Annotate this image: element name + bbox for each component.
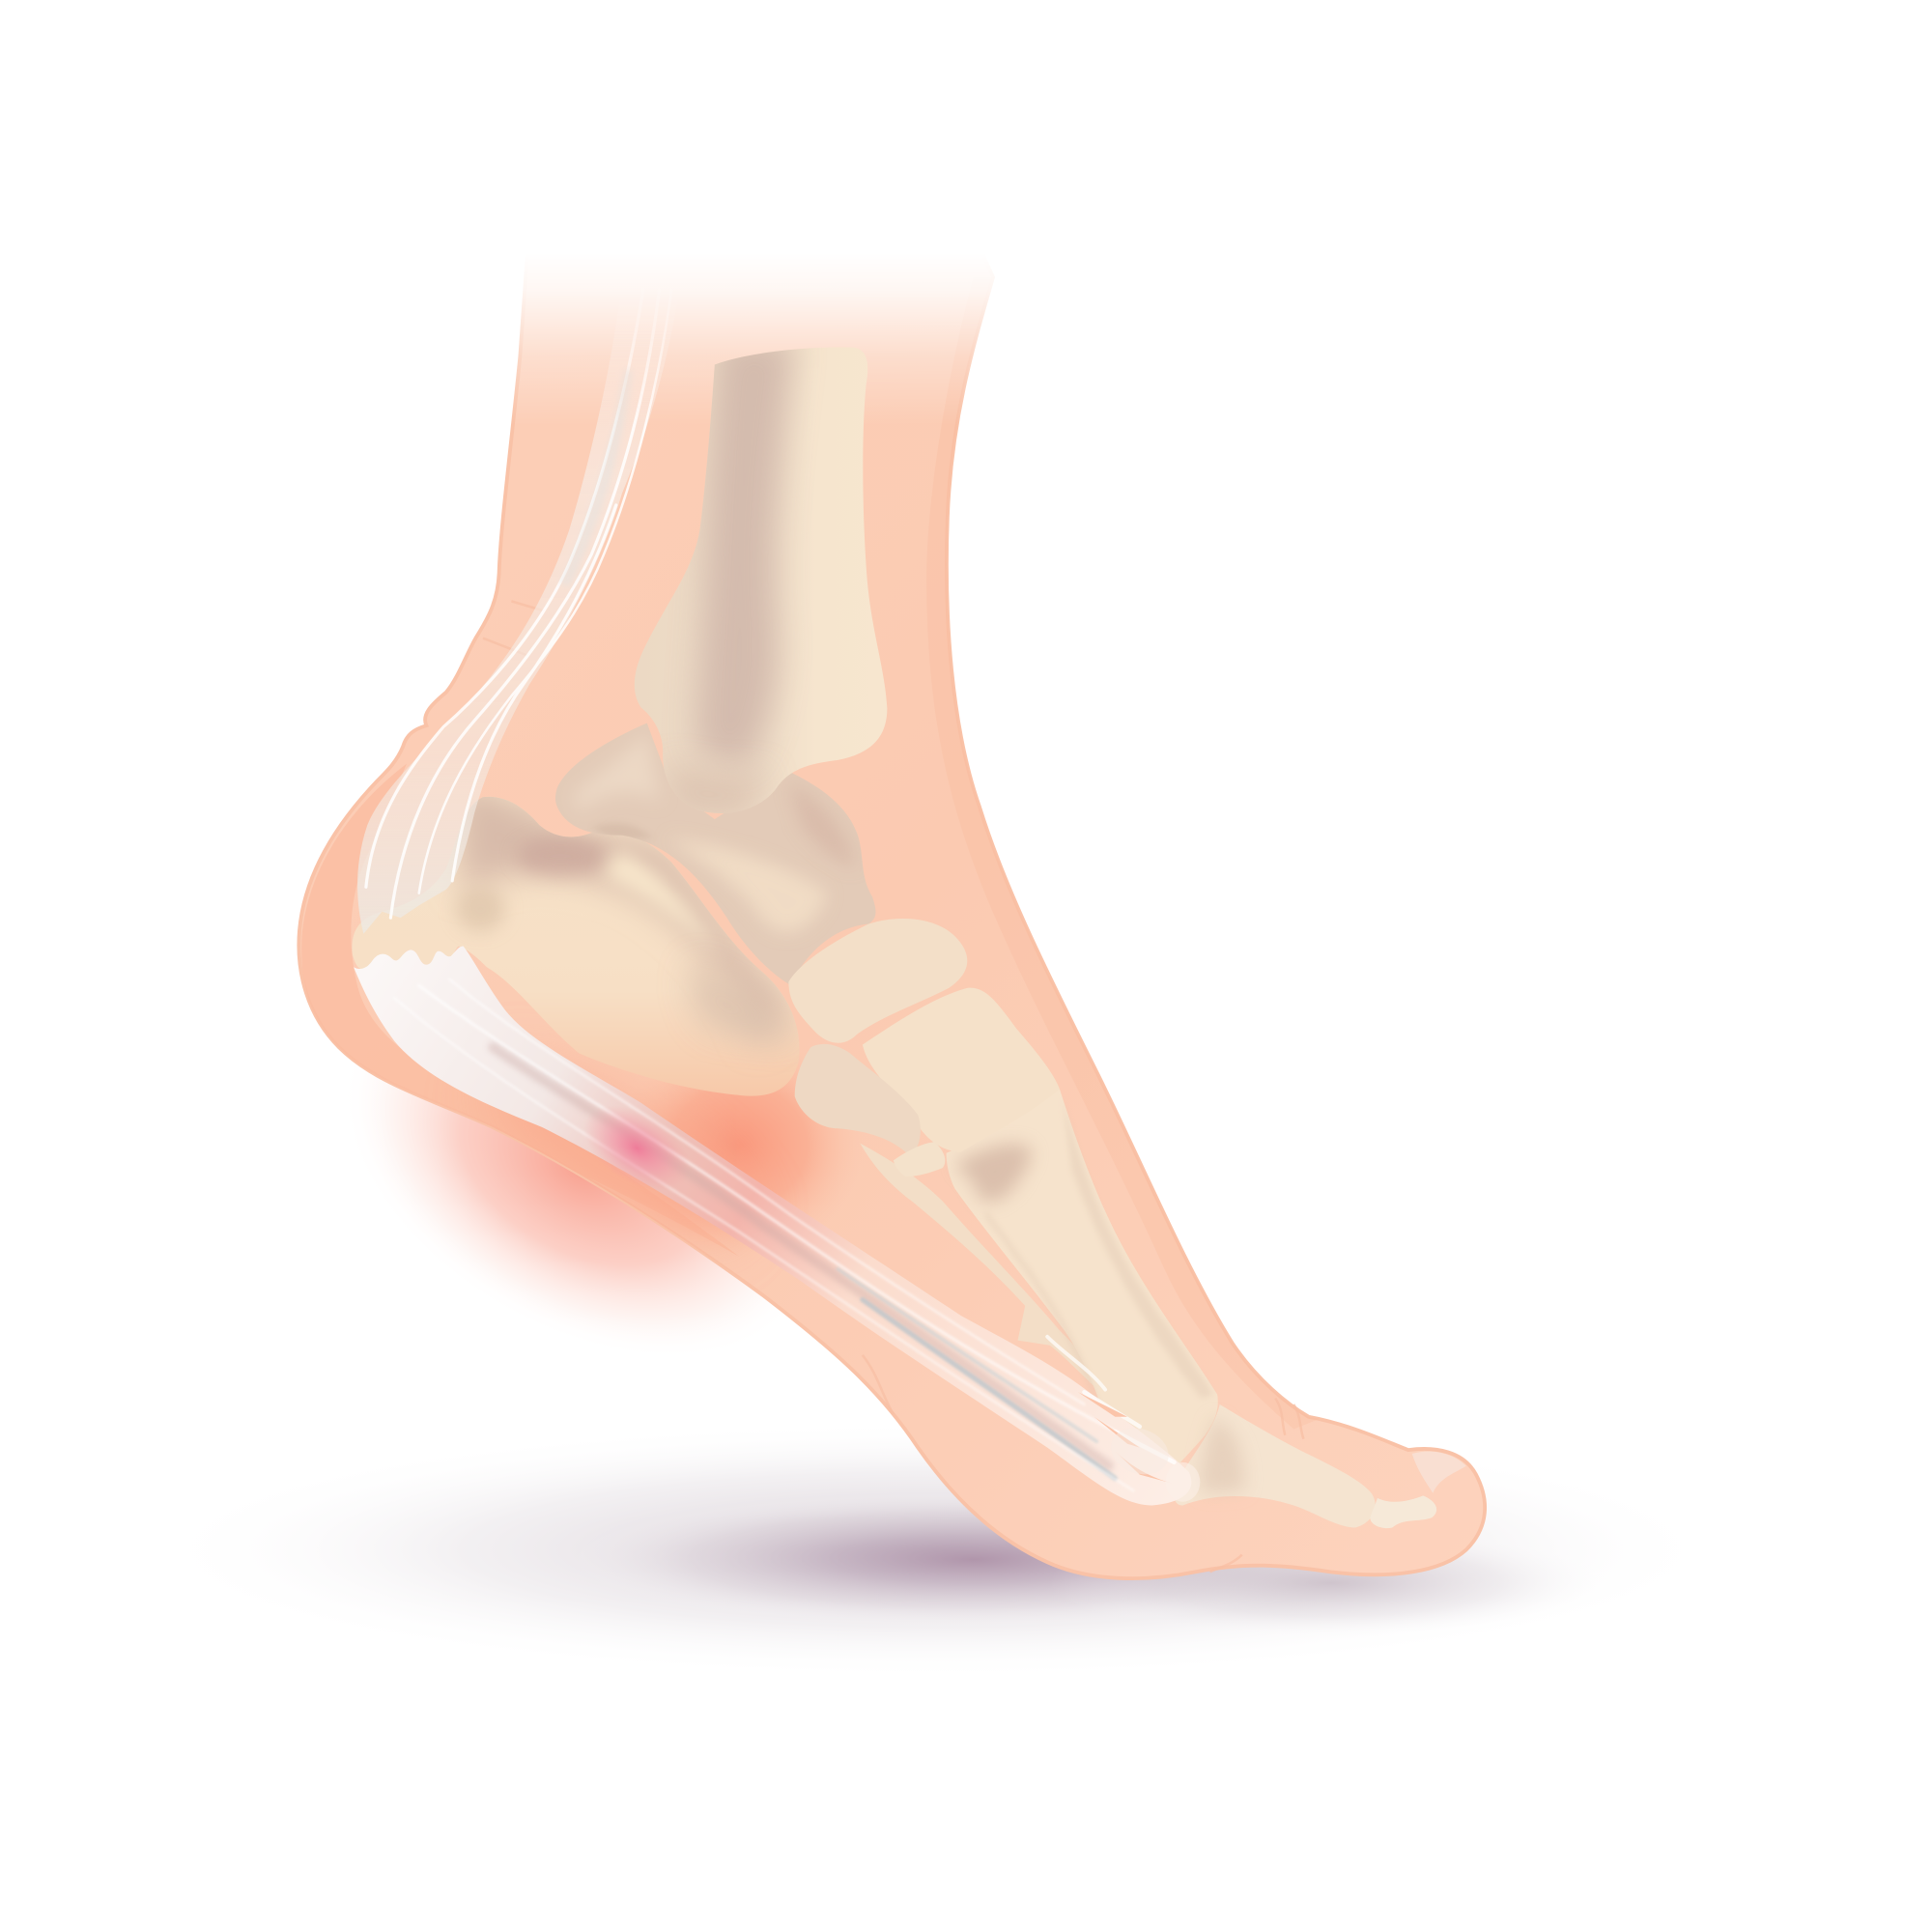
inflammation glow outside the sole [275, 902, 883, 1438]
bone: calcaneus (heel bone) [352, 777, 800, 1096]
skin fill [298, 252, 1485, 1578]
bone: navicular [788, 919, 967, 1043]
ground shadow beneath the foot [148, 1421, 1725, 1679]
illustration: foot anatomy with inflamed plantar fascia [297, 274, 1549, 1640]
bone: distal phalanx [1370, 1495, 1436, 1528]
sesamoid overlay [1166, 1462, 1200, 1502]
pain spot on the fascia [569, 1088, 705, 1208]
bone: cuneiform [863, 988, 1060, 1151]
bone: talus [555, 723, 876, 985]
tibia shading [696, 339, 795, 770]
metatarsal shading [955, 1144, 1033, 1202]
skin folds [483, 601, 1303, 1572]
skin gaps between fascia slips [1078, 1392, 1177, 1485]
bone: second metatarsal [860, 1144, 1106, 1399]
bone: proximal phalanx [1174, 1404, 1376, 1527]
bone: cuboid [795, 1044, 945, 1177]
phalanx shading [1201, 1417, 1244, 1493]
achilles fibres [366, 290, 671, 918]
foot silhouette with skin layers [298, 252, 1485, 1578]
talus highlights [688, 842, 824, 932]
metatarsal head overlay [1104, 1420, 1175, 1482]
plantar fascia [354, 947, 1200, 1506]
skin shading bands [301, 277, 1324, 1429]
small tarsal bone [894, 1142, 945, 1177]
bone: first metatarsal [947, 1089, 1218, 1476]
calcaneus shading [454, 797, 788, 1024]
Achilles tendon [357, 277, 681, 934]
bone: tibia [635, 339, 887, 819]
toenail [1412, 1452, 1466, 1493]
fascia fibres [394, 979, 1175, 1490]
